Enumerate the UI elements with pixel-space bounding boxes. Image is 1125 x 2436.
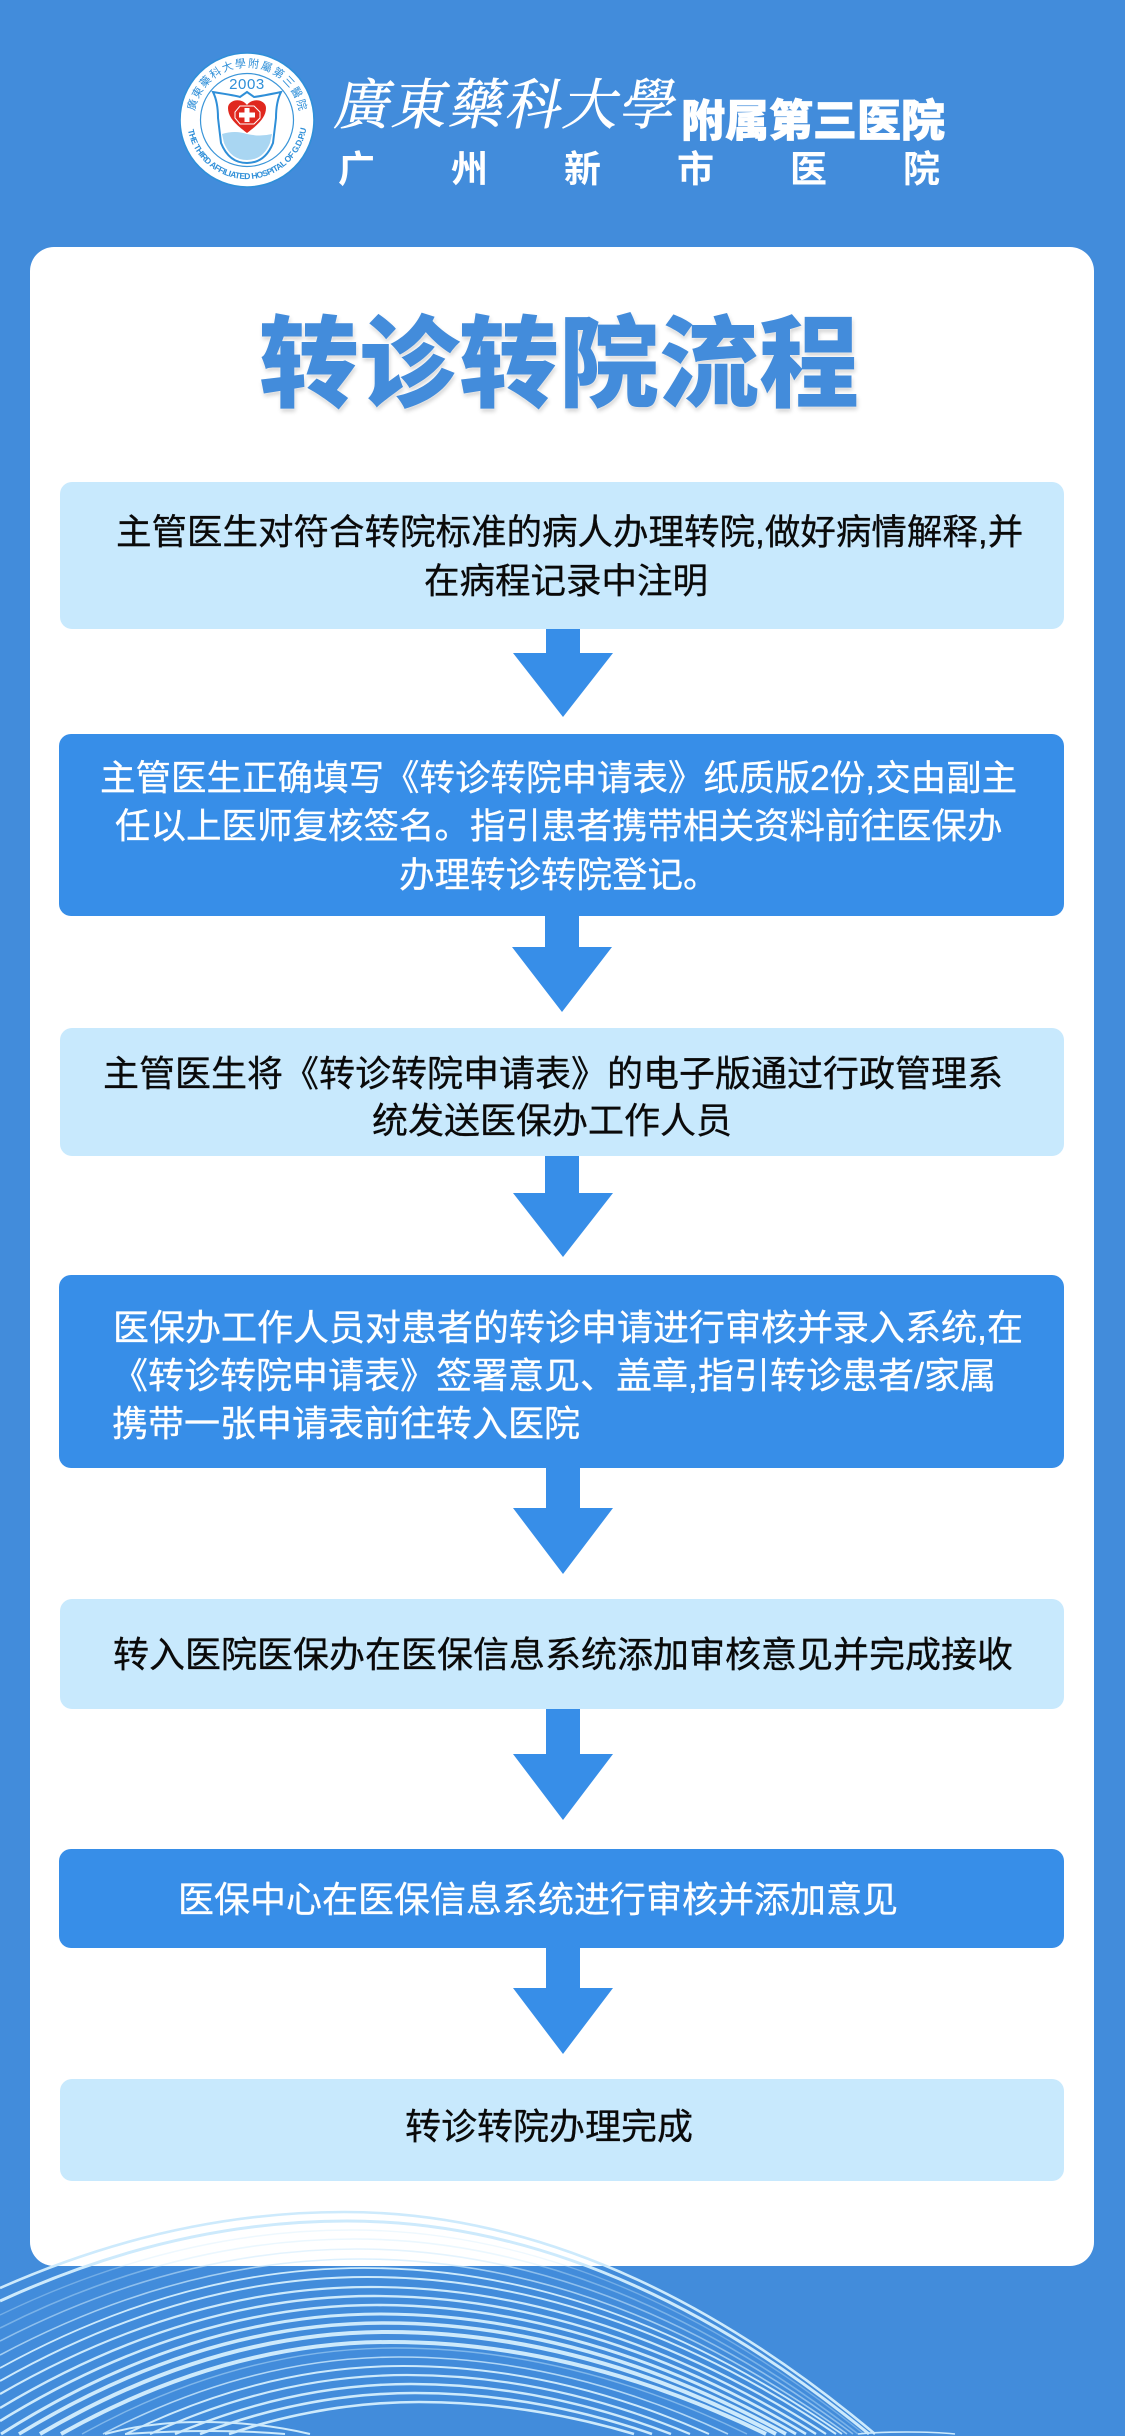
step 6: 医保中心在医保信息系统进行审核并添加意见 [178, 1879, 898, 1920]
step 4: 携带一张申请表前往转入医院 [112, 1403, 580, 1444]
step 2 [59, 734, 1064, 916]
step 1: 在病程记录中注明 [424, 561, 708, 601]
step 2: 任以上医师复核签名。指引患者携带相关资料前往医保办 [115, 806, 1003, 846]
arrow 3 [513, 1156, 613, 1257]
step 7 [60, 2079, 1064, 2181]
step 4 [59, 1275, 1064, 1468]
arrow 1 [513, 629, 613, 717]
step 2: 主管医生正确填写《转诊转院申请表》纸质版2份,交由副主 [100, 758, 1017, 798]
calligraphic university name: 廣東藥科大學 [330, 61, 689, 140]
step 3: 主管医生将《转诊转院申请表》的电子版通过行政管理系 [103, 1053, 1003, 1094]
step 4: 《转诊转院申请表》签署意见、盖章,指引转诊患者/家属 [112, 1355, 996, 1396]
arrow 4 [513, 1468, 613, 1574]
icon: hospital logo [180, 52, 315, 188]
icon: hospital logo: 廣東藥科大學附屬第三醫院 [186, 58, 308, 111]
step 7: 转诊转院办理完成 [405, 2106, 693, 2147]
step 3 [60, 1028, 1064, 1156]
arrow 5 [513, 1709, 613, 1820]
step 5 [60, 1599, 1064, 1709]
hospital affiliation name: 附属第三医院 [681, 85, 945, 149]
arrow 6 [513, 1948, 613, 2054]
step 2: 办理转诊转院登记。 [399, 855, 719, 895]
step 1: 主管医生对符合转院标准的病人办理转院,做好病情解释,并 [116, 512, 1023, 552]
step 1 [60, 482, 1064, 629]
step 4: 医保办工作人员对患者的转诊申请进行审核并录入系统,在 [113, 1307, 1023, 1348]
white content card [30, 247, 1094, 2266]
step 3: 统发送医保办工作人员 [372, 1100, 732, 1141]
icon: hospital logo: THE THIRD AFFILIATED HOSPITAL OF G.D.P.U [188, 128, 306, 180]
icon: hospital logo: 2003 [229, 76, 265, 93]
header [180, 52, 1016, 193]
step 6 [59, 1849, 1064, 1948]
step 5: 转入医院医保办在医保信息系统添加审核意见并完成接收 [113, 1634, 1013, 1675]
arrow 2 [512, 916, 612, 1012]
hospital second name: 广州新市医院 [338, 139, 1016, 193]
title: 转诊转院流程 [259, 283, 859, 428]
